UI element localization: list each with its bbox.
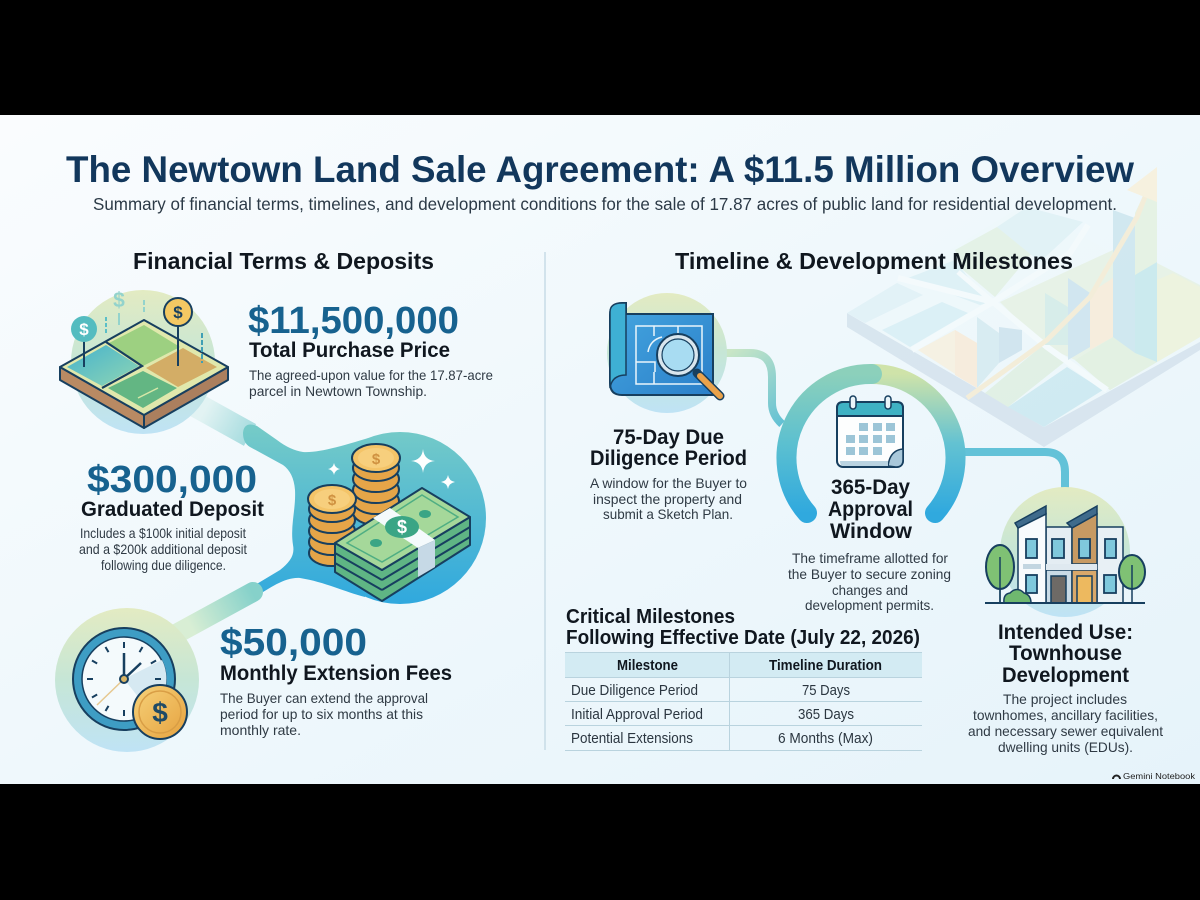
icon: land parcel: $ (79, 320, 89, 339)
table: critical milestones: Due Diligence Period (571, 683, 698, 699)
table: critical milestones: Timeline Duration (769, 658, 882, 674)
text block: monthly extension fees: The Buyer can extend the approval (220, 690, 428, 706)
icon: coins and cash (308, 444, 470, 601)
panel: financial terms and deposits (55, 248, 493, 752)
heading: financial terms: Financial Terms & Deposits (133, 248, 434, 274)
text block: 75-day due diligence: 75-Day Due (613, 426, 724, 449)
infographic background panel (0, 115, 1200, 784)
text block: graduated deposit: Includes a $100k initial deposit (80, 525, 246, 541)
arc: approval window progress ring (786, 374, 956, 513)
heading: critical milestones: Following Effective Date (July 22, 2026) (566, 627, 920, 649)
table: critical milestones (565, 652, 922, 750)
table: critical milestones: Milestone (617, 658, 678, 674)
icon: coins and cash: $ (397, 517, 407, 537)
text block: intended use: Townhouse (1009, 642, 1122, 665)
watermark: Gemini Notebook: Gemini Notebook (1123, 771, 1196, 781)
heading: critical milestones: Critical Milestones (566, 606, 735, 628)
text block: total purchase price: $11,500,000 (248, 300, 459, 342)
text block: graduated deposit: Graduated Deposit (81, 498, 264, 521)
text block: graduated deposit (79, 459, 264, 573)
text block: 75-day due diligence: Diligence Period (590, 447, 747, 470)
text block: monthly extension fees: period for up to six months at this (220, 706, 423, 722)
table: critical milestones: 6 Months (Max) (778, 731, 873, 747)
icon: land parcel: $ (113, 289, 125, 312)
text block: intended use: Intended Use: (998, 621, 1133, 644)
text block: intended use (968, 621, 1163, 755)
text block: 75-day due diligence: submit a Sketch Plan. (603, 506, 733, 522)
icon: land parcel (60, 289, 228, 434)
text block: monthly extension fees: $50,000 (220, 622, 367, 664)
background illustration: isometric map with rising chart (847, 167, 1200, 447)
heading: timeline: Timeline & Development Milestones (675, 248, 1073, 274)
icon: coins and cash: $ (372, 451, 381, 468)
icon: calendar (837, 396, 903, 467)
text block: 365-day approval window: The timeframe allotted for (792, 550, 948, 566)
text block: total purchase price: The agreed-upon value for the 17.87-acre (249, 367, 493, 383)
connector: blueprint to arc (726, 353, 782, 424)
text block: total purchase price: parcel in Newtown Township. (249, 383, 427, 399)
text block: 365-day approval window: changes and (832, 582, 908, 598)
text block: 365-day approval window: development permits. (805, 597, 934, 613)
text block: 365-day approval window (788, 476, 951, 613)
text block: total purchase price (248, 300, 493, 399)
text block: 365-day approval window: Approval (828, 498, 913, 521)
title: The Newtown Land Sale Agreement: A $11.5 Million Overview (66, 149, 1134, 190)
icon: land parcel: $ (173, 303, 183, 322)
icon: clock with coin: $ (152, 697, 168, 728)
text block: monthly extension fees: Monthly Extension Fees (220, 662, 452, 685)
text block: monthly extension fees: monthly rate. (220, 722, 301, 738)
text block: intended use: and necessary sewer equivalent (968, 723, 1163, 739)
text block: 365-day approval window: the Buyer to secure zoning (788, 566, 951, 582)
text block: 75-day due diligence: A window for the Buyer to (590, 475, 747, 491)
text block: graduated deposit: $300,000 (87, 459, 257, 501)
icon: townhouses (985, 487, 1145, 617)
column divider (544, 252, 546, 750)
subtitle: Summary of financial terms, timelines, and development conditions for the sale of 17.87 acres of public land for residential development. (93, 194, 1117, 214)
text block: monthly extension fees (220, 622, 452, 738)
text block: intended use: Development (1002, 664, 1129, 687)
connector: arc to house (960, 452, 1065, 488)
text block: 365-day approval window: Window (830, 520, 913, 543)
text block: 75-day due diligence: inspect the property and (593, 491, 742, 507)
icon: coins and cash: $ (328, 492, 337, 509)
table: critical milestones: Potential Extensions (571, 731, 693, 747)
panel: timeline and development milestones (565, 248, 1163, 755)
text block: graduated deposit: following due diligence. (101, 557, 226, 573)
heading: critical milestones (566, 606, 920, 649)
table: critical milestones: 365 Days (798, 707, 854, 723)
text block: intended use: The project includes (1003, 691, 1127, 707)
icon: blueprint with magnifier (607, 293, 727, 413)
text block: intended use: townhomes, ancillary facilities, (973, 707, 1158, 723)
table: critical milestones: Initial Approval Period (571, 707, 703, 723)
text block: 365-day approval window: 365-Day (831, 476, 910, 499)
connector tubes and hub (165, 400, 486, 640)
text block: 75-day due diligence (590, 426, 747, 522)
table: critical milestones: 75 Days (802, 683, 850, 699)
icon: clock with coin (55, 608, 199, 752)
text block: intended use: dwelling units (EDUs). (998, 739, 1133, 755)
text block: total purchase price: Total Purchase Price (249, 339, 450, 362)
text block: graduated deposit: and a $200k additional deposit (79, 541, 247, 557)
